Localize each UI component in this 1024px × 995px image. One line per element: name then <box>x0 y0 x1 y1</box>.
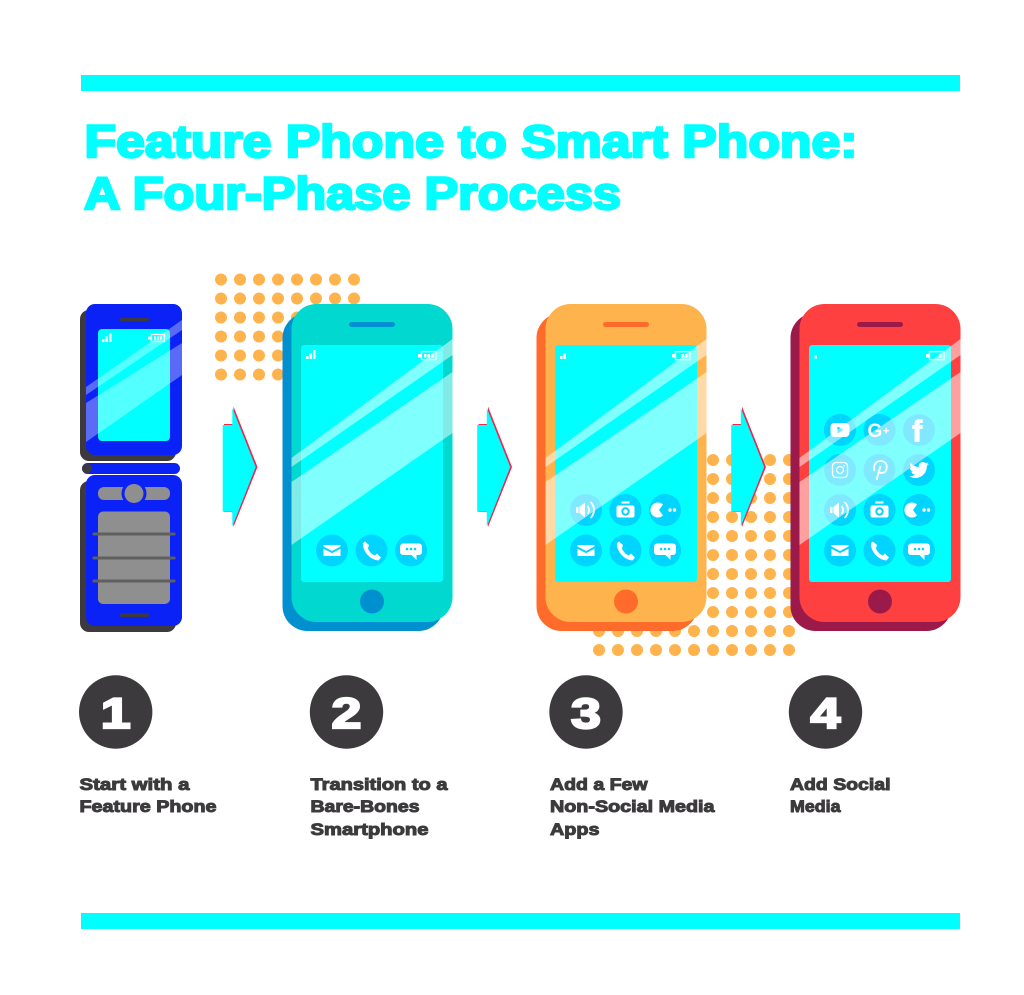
app icon: Twitter <box>903 454 935 486</box>
step 4 badge <box>789 675 862 749</box>
arrow 3 <box>731 406 766 527</box>
step 1 badge <box>79 675 152 749</box>
phone 1: feature flip phone <box>80 304 182 632</box>
status: battery <box>418 352 436 360</box>
app icon: camera <box>610 494 642 526</box>
app icon: Facebook: f <box>912 414 923 448</box>
glass reflection <box>546 339 706 545</box>
app icon: phone <box>610 534 642 566</box>
phone 2: bare-bones smartphone <box>282 304 452 631</box>
app icon: Google Plus: G <box>868 421 882 442</box>
app icon: sound <box>824 494 856 526</box>
step 3 label: Add a Few <box>550 775 648 794</box>
dot pattern behind phones 3 and 4 <box>590 450 798 660</box>
step 1 label: Start with a <box>80 775 190 794</box>
app icon: phone <box>864 534 896 566</box>
arrow 2 <box>477 406 512 527</box>
step 3 label: Non-Social Media <box>550 797 715 816</box>
app icon: YouTube <box>824 414 856 446</box>
app icon: Google Plus: + <box>883 426 889 438</box>
step 4 label <box>790 775 890 816</box>
step 3 badge: 3 <box>571 690 601 738</box>
step 2 label: Bare-Bones <box>310 797 420 816</box>
title: A Four-Phase Process <box>84 168 621 219</box>
app icon: camera <box>864 494 896 526</box>
app icon: game <box>649 494 681 526</box>
app icon: game <box>903 494 935 526</box>
step 2 label: Smartphone <box>310 820 428 839</box>
glass reflection <box>292 339 452 545</box>
phone 4: social media apps <box>790 304 960 631</box>
status: battery <box>926 352 944 360</box>
app icon: sound <box>570 494 602 526</box>
app icon: chat <box>395 534 427 566</box>
bottom cyan bar <box>81 913 960 929</box>
step 3 label: Apps <box>550 820 600 839</box>
step 2 label <box>310 775 448 839</box>
app icon: mail <box>570 534 602 566</box>
status: signal dot <box>814 356 817 358</box>
top cyan bar <box>81 75 960 91</box>
step 1 label: Feature Phone <box>80 797 216 816</box>
status: battery <box>672 352 690 360</box>
step 3 label <box>550 775 715 839</box>
step 4 label: Media <box>790 797 841 816</box>
step 1 label <box>80 775 216 816</box>
step 2 badge <box>310 675 383 749</box>
flip phone top half <box>80 304 182 461</box>
app icon: phone <box>356 534 388 566</box>
app icon: Google Plus <box>864 414 896 446</box>
step 2 label: Transition to a <box>310 775 448 794</box>
app icon: chat <box>649 534 681 566</box>
glass reflection <box>800 339 960 545</box>
status: signal bars <box>306 350 316 359</box>
flip phone keypad half <box>80 475 182 632</box>
step 1 badge: 1 <box>101 690 131 738</box>
step 3 badge <box>549 675 623 749</box>
flip phone hinge <box>82 463 180 474</box>
step 4 label: Add Social <box>790 775 890 794</box>
title <box>84 116 858 219</box>
phone 3: few non-social apps <box>536 304 706 631</box>
app icon: Pinterest <box>864 454 896 486</box>
arrow 1 <box>223 406 258 527</box>
status: signal bars <box>560 354 566 359</box>
app icon: mail <box>316 534 348 566</box>
app icon: chat <box>903 534 935 566</box>
app icon: mail <box>824 534 856 566</box>
title: Feature Phone to Smart Phone: <box>84 116 858 167</box>
step 4 badge: 4 <box>811 690 840 738</box>
step 2 badge: 2 <box>332 690 361 738</box>
app icon: Facebook <box>903 414 935 448</box>
app icon: Instagram <box>824 454 856 486</box>
dot pattern behind phone 2 <box>212 270 364 384</box>
